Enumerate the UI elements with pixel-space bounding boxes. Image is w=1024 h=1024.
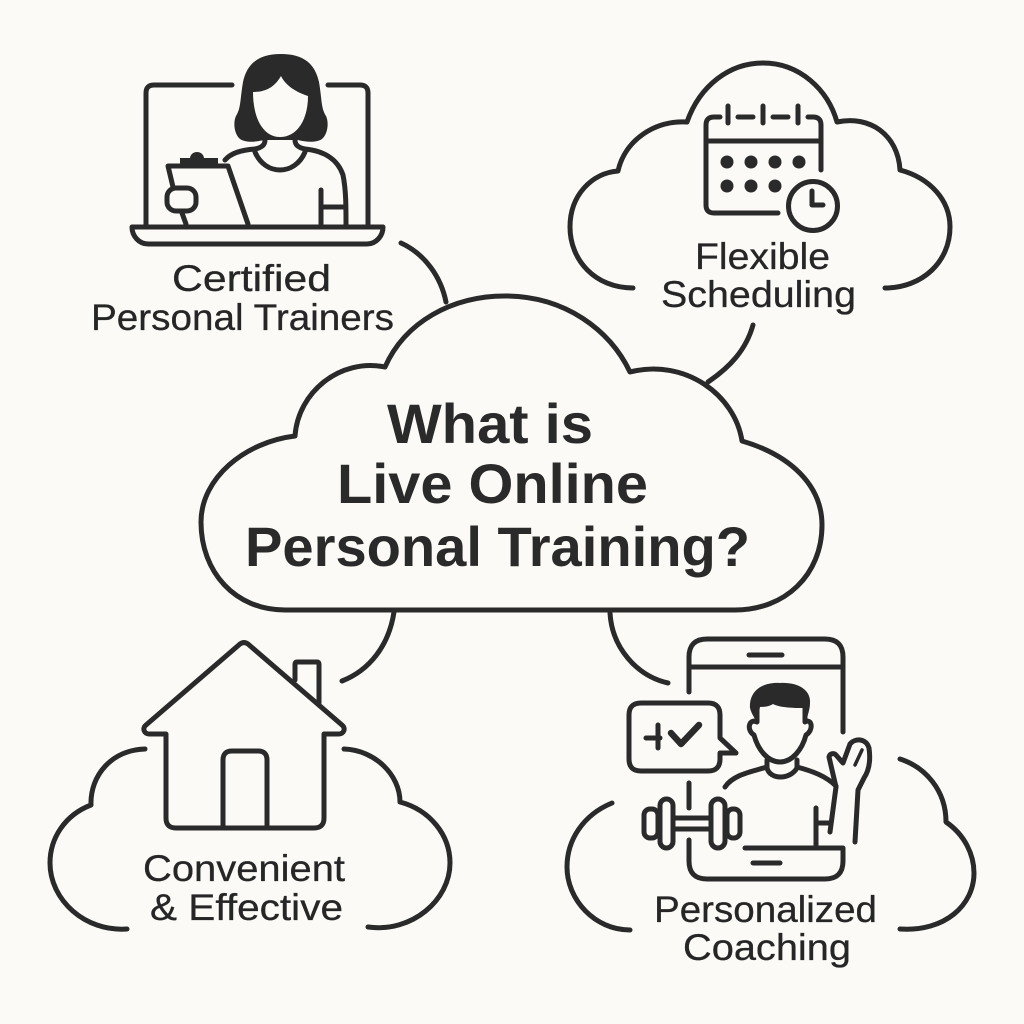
label: flexible scheduling: Scheduling [661,274,856,315]
panel: central cloud [201,296,822,610]
label: convenient and effective: & Effective [150,887,343,928]
label: certified personal trainers: Personal Trainers [91,297,394,338]
icon: coach waving [725,683,870,848]
label: certified personal trainers: Certified [172,258,331,299]
label: convenient and effective: Convenient [143,848,346,889]
icon: dumbbell [644,799,740,848]
connector: certified trainers to center [401,243,446,302]
connector: convenient to center [342,612,394,681]
icon: house [144,642,344,828]
title: Live Online [337,452,648,515]
cloud outline [50,749,450,929]
icon: phone [689,639,843,879]
central cloud outline [201,296,822,610]
title: What is [387,392,593,455]
title: Personal Training? [245,515,750,578]
label: personalized coaching: Coaching [683,927,851,968]
icon: calendar with clock [706,106,838,230]
panel: convenient and effective [50,642,450,929]
panel: personalized coaching [567,639,974,968]
label: personalized coaching: Personalized [654,889,877,930]
icon: laptop [132,85,383,244]
panel: flexible scheduling [570,63,950,315]
icon: trainer with clipboard [167,54,346,225]
icon: speech bubble with check [629,703,736,771]
connector: personalized coaching to center [610,613,668,683]
cloud outline [570,63,950,288]
label: flexible scheduling: Flexible [695,236,830,277]
cloud outline [567,759,974,930]
connector: flexible scheduling to center [708,325,753,382]
panel: certified personal trainers [91,54,394,338]
